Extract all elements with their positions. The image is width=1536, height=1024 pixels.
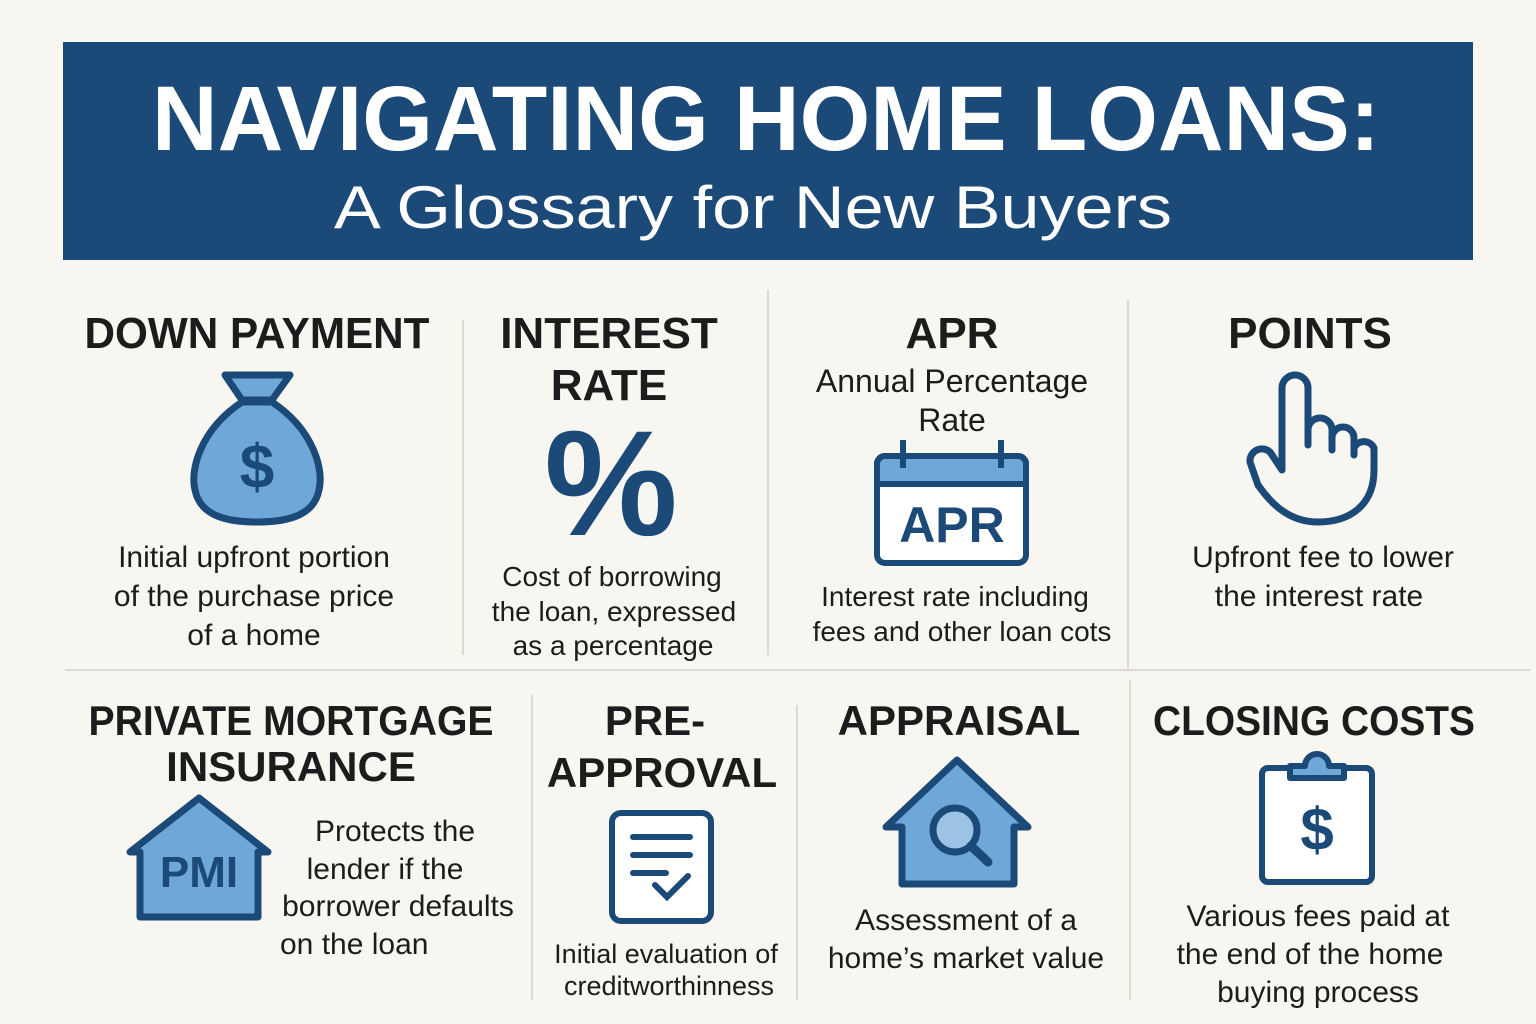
panel: private mortgage insurance: Protects the [315, 815, 475, 848]
panel: APR: fees and other loan cots [813, 616, 1111, 647]
panel: pre-approval: Initial evaluation of [554, 939, 778, 969]
icon: calendar: APR [899, 497, 1005, 553]
icon: house with magnifier [886, 760, 1028, 884]
panel: pre-approval [547, 697, 778, 1001]
panel: APR [813, 309, 1111, 647]
panel: interest rate: the loan, expressed [492, 596, 736, 627]
panel: closing costs: Various fees paid at [1187, 900, 1450, 933]
icon: pointing hand [1250, 375, 1374, 522]
title: NAVIGATING HOME LOANS: [152, 68, 1380, 170]
panel: private mortgage insurance: PRIVATE MORTGAGE [88, 697, 494, 744]
panel: down payment: Initial upfront portion [118, 541, 390, 574]
panel: appraisal: Assessment of a [855, 904, 1077, 937]
panel: interest rate: RATE [551, 361, 667, 410]
panel: closing costs: CLOSING COSTS [1153, 697, 1475, 744]
panel: points: Upfront fee to lower [1192, 541, 1454, 574]
panel: pre-approval: creditworthinness [564, 971, 774, 1001]
icon: PMI house: PMI [160, 848, 238, 897]
panel: interest rate [492, 309, 736, 661]
panel: appraisal: home’s market value [828, 942, 1104, 975]
panel: down payment: of a home [187, 619, 321, 652]
panel: private mortgage insurance: borrower defaults [282, 890, 514, 923]
icon: clipboard with dollar [1262, 754, 1372, 882]
icon: money bag [194, 375, 320, 522]
panel: appraisal [828, 697, 1104, 975]
icon: PMI house [130, 798, 268, 917]
panel: points [1192, 309, 1454, 613]
panel: private mortgage insurance: on the loan [280, 928, 428, 961]
panel: pre-approval: APPROVAL [547, 749, 777, 796]
panel: closing costs: the end of the home [1177, 938, 1443, 971]
panel: down payment: DOWN PAYMENT [84, 309, 430, 358]
icon: clipboard with dollar: $ [1300, 796, 1334, 863]
panel: pre-approval: PRE- [605, 697, 705, 744]
panel: private mortgage insurance [88, 697, 514, 961]
panel: interest rate: INTEREST [500, 309, 718, 358]
panel: points: the interest rate [1215, 580, 1423, 613]
panel: points: POINTS [1228, 309, 1392, 358]
panel: interest rate: as a percentage [513, 630, 713, 661]
panel: closing costs: buying process [1217, 976, 1419, 1009]
panel: down payment: of the purchase price [114, 580, 394, 613]
panel: appraisal: APPRAISAL [838, 697, 1080, 744]
panel: private mortgage insurance: lender if the [307, 853, 463, 886]
icon: money bag: $ [240, 433, 274, 502]
icon: percent: % [544, 399, 678, 567]
panel: private mortgage insurance: INSURANCE [166, 743, 416, 790]
icon: calendar [877, 440, 1026, 563]
title banner [63, 42, 1473, 260]
panel: APR: APR [906, 309, 998, 358]
subtitle: A Glossary for New Buyers [334, 174, 1172, 241]
panel: APR: Annual Percentage [816, 363, 1088, 399]
panel: APR: Rate [918, 402, 986, 438]
panel: down payment [84, 309, 430, 652]
panel: closing costs [1153, 697, 1475, 1009]
panel: APR: Interest rate including [821, 581, 1089, 612]
panel: interest rate: Cost of borrowing [502, 561, 722, 592]
icon: checklist document [612, 813, 711, 921]
